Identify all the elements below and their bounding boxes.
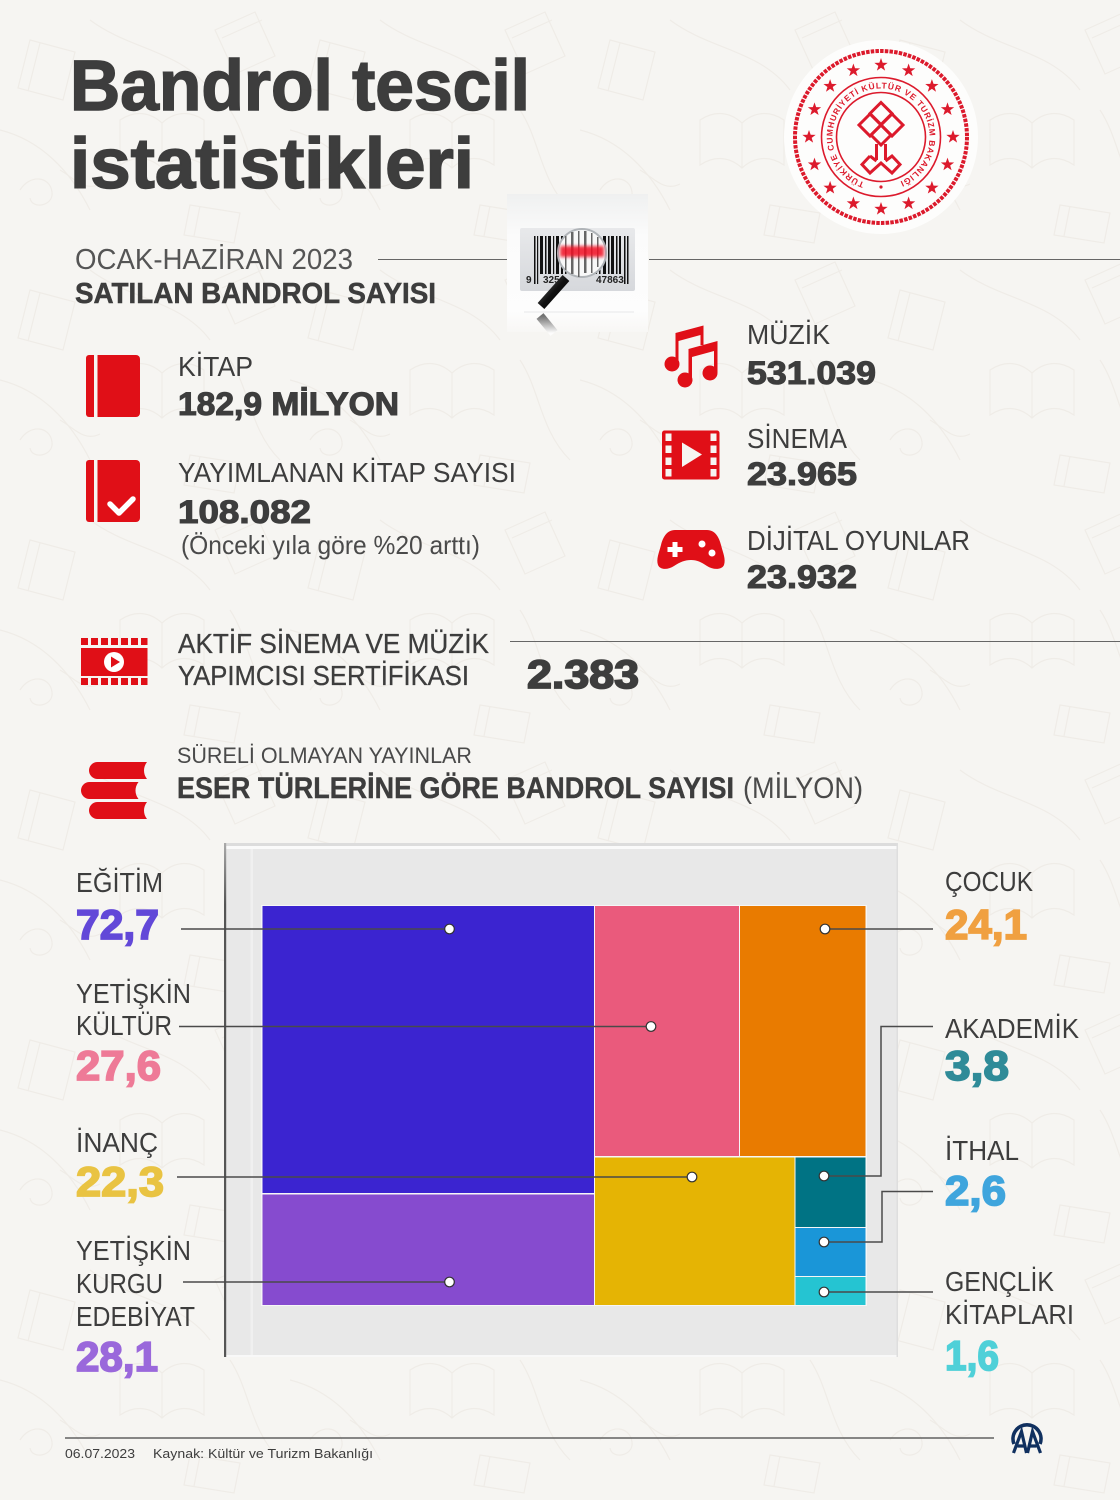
label: inanc: İNANÇ (76, 1127, 158, 1158)
label: yetiskin kurgu edebiyat: KURGU (76, 1268, 163, 1299)
stat: sinema: 23.965 (747, 456, 857, 492)
label: cocuk (945, 866, 1033, 948)
footer: 06.07.2023 (65, 1446, 135, 1461)
treemap cell: genclik kitaplari (796, 1277, 866, 1305)
icon: ministry seal (784, 40, 978, 234)
stat: muzik: MÜZİK (747, 319, 830, 350)
label: ithal: İTHAL (945, 1135, 1019, 1166)
stat: sinema: SİNEMA (747, 423, 847, 454)
label: egitim: EĞİTİM (76, 867, 163, 898)
label: yetiskin kultur: YETİŞKİN (76, 978, 191, 1009)
treemap cell: cocuk (740, 906, 866, 1156)
stat: aktif yapimci sertifikasi: AKTİF SİNEMA VE MÜZİK (178, 628, 489, 659)
footer: Kaynak: Kültür ve Turizm Bakanlığı (153, 1446, 373, 1461)
label: yetiskin kultur: 27,6 (76, 1042, 161, 1089)
stat: aktif yapimci sertifikasi (81, 628, 639, 697)
label: yetiskin kurgu edebiyat (76, 1235, 195, 1380)
label: akademik: 3,8 (945, 1042, 1009, 1089)
label: yetiskin kultur (76, 978, 191, 1089)
icon: book with check mark (86, 460, 140, 522)
icon: AA logo (1013, 1425, 1041, 1453)
stat: dijital oyunlar: 23.932 (747, 559, 857, 595)
label: genclik kitaplari: 1,6 (945, 1332, 999, 1379)
stat: yayimlanan kitap sayisi: 108.082 (178, 494, 311, 530)
stat: aktif yapimci sertifikasi: YAPIMCISI SERTİFİKASI (178, 660, 469, 691)
section heading: eser turlerine gore bandrol sayisi: (MİLYON) (743, 772, 863, 805)
label: ithal: 2,6 (945, 1167, 1006, 1214)
connector dots (445, 924, 830, 1297)
label: genclik kitaplari (945, 1266, 1074, 1379)
panel: treemap chart (224, 843, 898, 1357)
icon: film reel with play (81, 638, 148, 685)
stat: aktif yapimci sertifikasi: 2.383 (527, 653, 639, 697)
label: akademik: AKADEMİK (945, 1013, 1079, 1044)
stat: yayimlanan kitap sayisi: YAYIMLANAN KİTAP SAYISI (178, 457, 516, 488)
connector lines (177, 929, 933, 1292)
stat: dijital oyunlar: DİJİTAL OYUNLAR (747, 525, 970, 556)
treemap cell: egitim (262, 906, 594, 1193)
stat: kitap (86, 351, 399, 422)
title: Bandrol tescil (70, 47, 530, 126)
label: yetiskin kurgu edebiyat: EDEBİYAT (76, 1301, 195, 1332)
label: inanc: 22,3 (76, 1158, 164, 1205)
section heading: eser turlerine gore bandrol sayisi: SÜRELİ OLMAYAN YAYINLAR (177, 743, 472, 768)
stat: muzik: 531.039 (747, 355, 876, 391)
stat: dijital oyunlar (657, 525, 970, 595)
icon: film strip with play (662, 430, 720, 480)
section heading: satilan bandrol sayisi: OCAK-HAZİRAN 2023 (75, 243, 353, 276)
icon: barcode and magnifying glass: 9 (526, 275, 532, 286)
stat: yayimlanan kitap sayisi: (Önceki yıla göre %20 arttı) (181, 530, 480, 560)
icon: music notes (664, 326, 718, 388)
label: inanc (76, 1127, 164, 1205)
title: istatistikleri (70, 125, 474, 204)
label: cocuk: 24,1 (945, 901, 1027, 948)
label: egitim: 72,7 (76, 901, 159, 948)
treemap cell: inanc (595, 1158, 794, 1305)
icon: stack of books (81, 762, 147, 819)
section heading: satilan bandrol sayisi: SATILAN BANDROL SAYISI (75, 278, 436, 310)
icon: ministry seal: TÜRKİYE CUMHURİYETİ KÜLTÜR VE TURİZM BAKANLIĞI (826, 82, 936, 188)
stat: kitap: KİTAP (178, 351, 253, 382)
label: egitim (76, 867, 163, 948)
stat: yayimlanan kitap sayisi (86, 457, 516, 560)
section heading: eser turlerine gore bandrol sayisi: ESER TÜRLERİNE GÖRE BANDROL SAYISI (177, 772, 734, 805)
treemap cell: akademik (796, 1158, 866, 1227)
label: ithal (945, 1135, 1019, 1214)
label: genclik kitaplari: KİTAPLARI (945, 1299, 1074, 1330)
label: yetiskin kultur: KÜLTÜR (76, 1010, 172, 1041)
treemap cell: yetiskin kurgu edebiyat (262, 1194, 594, 1305)
footer (65, 1438, 994, 1461)
label: cocuk: ÇOCUK (945, 866, 1033, 897)
section heading: satilan bandrol sayisi (75, 243, 436, 310)
label: yetiskin kurgu edebiyat: YETİŞKİN (76, 1235, 191, 1266)
icon: barcode and magnifying glass (507, 194, 648, 333)
stat: sinema (662, 423, 857, 492)
section heading: eser turlerine gore bandrol sayisi (81, 743, 863, 819)
treemap cell: yetiskin kultur (595, 906, 739, 1156)
stat: kitap: 182,9 MİLYON (178, 386, 399, 422)
icon: game controller (657, 530, 725, 569)
stat: muzik (664, 319, 876, 391)
label: yetiskin kurgu edebiyat: 28,1 (76, 1333, 158, 1380)
title (70, 47, 530, 204)
label: akademik (945, 1013, 1079, 1089)
icon: barcode and magnifying glass: 47863 (596, 275, 624, 286)
icon: barcode and magnifying glass: 325 (543, 275, 560, 286)
icon: book (86, 355, 140, 417)
treemap cell: ithal (796, 1228, 866, 1276)
label: genclik kitaplari: GENÇLİK (945, 1266, 1054, 1297)
